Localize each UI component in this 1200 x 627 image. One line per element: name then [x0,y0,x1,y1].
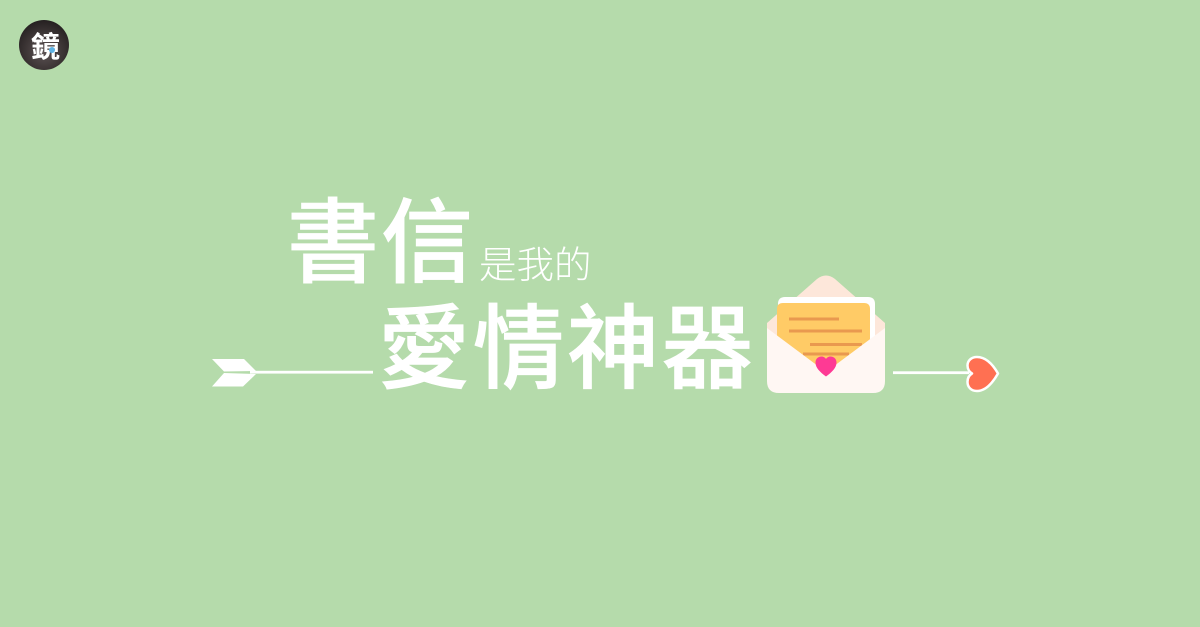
white sheet [778,297,875,350]
logo badge [19,20,69,70]
title: first line large: 書信 [287,193,475,295]
pink heart seal [816,356,836,376]
title: second line: 愛情神器 [378,299,756,401]
logo badge: 鏡 [31,32,60,64]
letter lines [789,318,862,356]
envelope front [767,328,885,393]
envelope back flap [767,276,885,350]
title: first line small: 是我的 [479,244,592,286]
yellow letter [777,303,870,372]
